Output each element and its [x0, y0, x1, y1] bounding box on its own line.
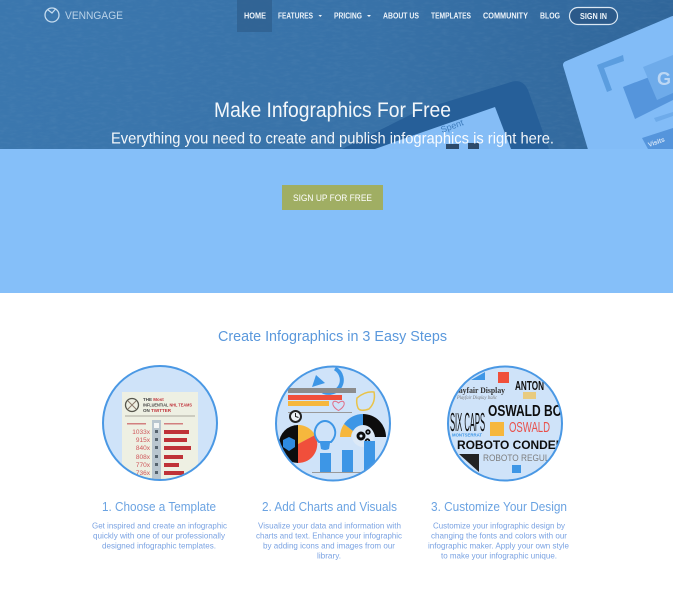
light blue call-to-action band — [0, 149, 673, 293]
sign up button — [282, 185, 383, 210]
step 3 circle: fonts: ROBOTO REGULAR — [483, 453, 561, 463]
step 2 description: by adding icons and images from our — [263, 540, 395, 550]
navigation bar: FEATURES — [278, 12, 314, 20]
step 3 circle: fonts: ANTON — [515, 379, 544, 393]
step 1 circle: template — [103, 366, 217, 482]
step 3 description: changing the fonts and colors with our — [431, 530, 567, 540]
step 1 circle: template: 808x — [136, 454, 151, 461]
step 1 circle: template: THE Most — [143, 397, 164, 402]
step 2 description — [256, 520, 403, 560]
step 1 circle: template: 770x — [136, 462, 151, 469]
sign up button: SIGN UP FOR FREE — [293, 193, 372, 204]
step 1 circle: template: ON TWITTER — [143, 408, 172, 413]
step 3 circle: fonts — [447, 366, 563, 482]
hero subtitle: Everything you need to create and publish infographics is right here. — [111, 130, 554, 148]
navigation bar — [237, 0, 560, 32]
step 3 description — [428, 520, 569, 560]
step 1 description — [92, 520, 228, 550]
navigation bar: HOME — [244, 12, 267, 20]
step 3 circle: fonts: MONTSERRAT — [452, 432, 482, 438]
step 2 description: charts and text. Enhance your infographic — [256, 530, 403, 540]
logo: VENNGAGE — [65, 10, 123, 22]
step 2 title: 2. Add Charts and Visuals — [262, 500, 397, 514]
step 1 circle: template: INFLUENTIAL NHL TEAMS — [143, 402, 192, 408]
step 1 title: 1. Choose a Template — [102, 500, 216, 514]
step 1 description: designed infographic templates. — [102, 540, 216, 550]
navigation bar: ABOUT US — [383, 12, 420, 20]
navigation bar: PRICING — [334, 12, 362, 20]
step 3 description: Customize your infographic design by — [433, 520, 566, 530]
navigation bar: BLOG — [540, 12, 560, 20]
step 1 circle: template: 1033x — [132, 429, 151, 436]
step 3 circle: fonts: OSWALD BOLD — [488, 403, 578, 420]
step 2 description: Visualize your data and information with — [258, 520, 401, 530]
step 3 description: to make your infographic unique. — [441, 550, 557, 560]
section heading: Create Infographics in 3 Easy Steps — [218, 328, 447, 345]
step 3 description: infographic maker. Apply your own style — [428, 540, 569, 550]
illustration: dark tablet — [342, 81, 549, 149]
sign in button: SIGN IN — [580, 12, 607, 21]
illustration: dark tablet: Spent — [439, 117, 465, 135]
hero banner — [0, 0, 673, 149]
step 3 circle: fonts: Playfair Display Italic — [456, 396, 498, 401]
step 2 circle: charts and visuals — [276, 366, 390, 480]
step 1 description: quickly with one of our professionally — [93, 530, 226, 540]
step 3 circle: fonts: OSWALD — [509, 419, 550, 436]
step 3 title: 3. Customize Your Design — [431, 500, 567, 514]
hero title: Make Infographics For Free — [214, 99, 451, 122]
step 3 circle: fonts: Playfair Display — [452, 386, 505, 395]
illustration: light tablet: Visits — [647, 136, 666, 149]
illustration: light tablet: G — [657, 69, 671, 89]
illustration: light tablet — [567, 20, 673, 149]
navigation bar: COMMUNITY — [483, 12, 529, 20]
step 3 circle: fonts: ROBOTO CONDENSED — [457, 440, 589, 452]
step 3 circle: fonts: SIX CAPS — [450, 407, 485, 437]
step 1 circle: template: 915x — [136, 437, 151, 444]
navigation bar: TEMPLATES — [431, 12, 472, 20]
logo — [45, 8, 123, 22]
step 1 circle: template: 736x — [136, 470, 151, 477]
step 1 circle: template: 840x — [136, 445, 151, 452]
step 2 description: library. — [317, 550, 341, 560]
sign in button — [570, 8, 618, 24]
step 1 description: Get inspired and create an infographic — [92, 520, 228, 530]
